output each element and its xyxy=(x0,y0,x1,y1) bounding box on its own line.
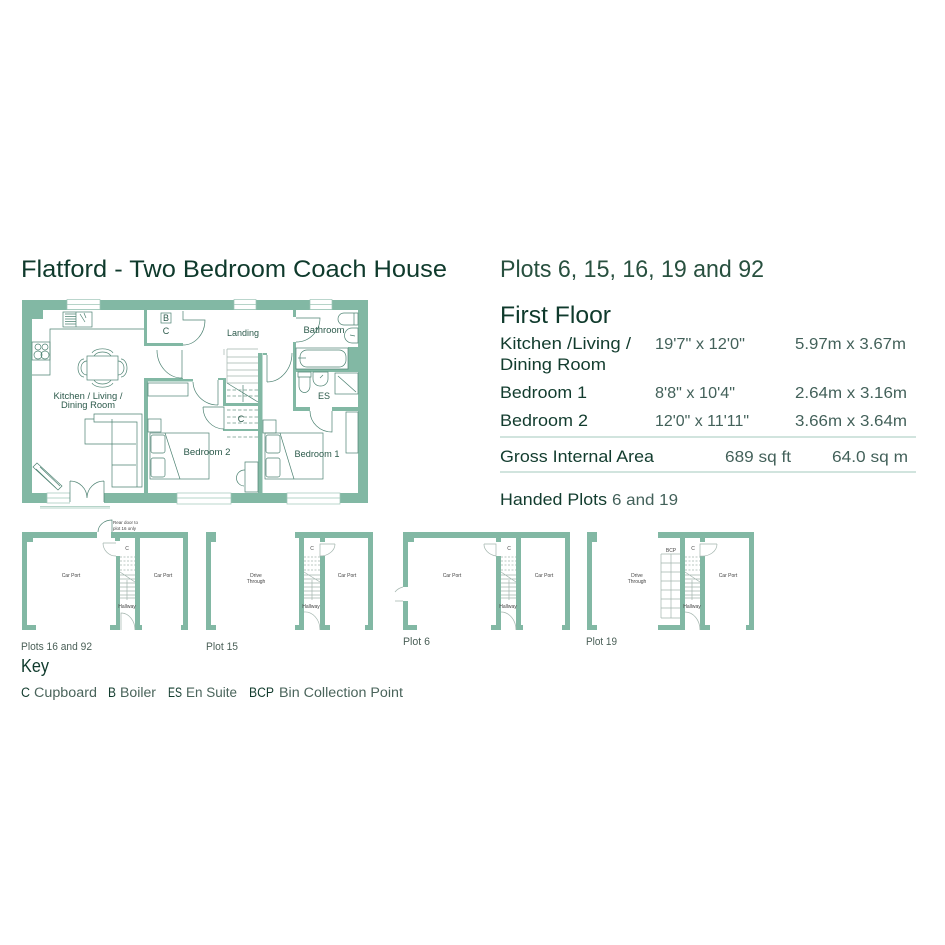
internal walls xyxy=(144,310,358,493)
ground plan: plot 6: Hallway xyxy=(499,604,517,610)
key items: Cupboard xyxy=(34,685,97,700)
bathroom label: Bathroom xyxy=(304,325,344,335)
media unit xyxy=(33,463,62,490)
key items: En Suite xyxy=(186,685,237,700)
handed plots note: 6 and 19 xyxy=(612,492,678,509)
ground plan: plots 16 and 92: Car Port xyxy=(62,573,81,579)
ground plan: plot 15: Through xyxy=(247,579,266,585)
ground plan: plot 15 xyxy=(206,532,373,630)
en suite label: ES xyxy=(318,391,330,401)
ground plan: plot 6 xyxy=(395,532,570,630)
kitchen row: Kitchen /Living / xyxy=(500,335,631,353)
key items: B xyxy=(108,685,116,700)
ground plan: plot 19 xyxy=(587,532,754,630)
ground plan: plots 16 and 92: Rear door to xyxy=(113,520,139,525)
ground plan: plot 19: Drive xyxy=(631,573,643,579)
key items: ES xyxy=(168,685,182,700)
bedroom 1 label: Bedroom 1 xyxy=(294,449,340,459)
bin collection grid xyxy=(661,554,680,618)
ground plan: plot 19: Car Port xyxy=(719,573,738,579)
kitchen row: 5.97m x 3.67m xyxy=(795,336,906,353)
windows xyxy=(40,300,340,508)
cupboard and boiler xyxy=(161,313,171,336)
ground plan: plots 16 and 92: plot 16 only xyxy=(113,526,137,531)
bedroom 1 furniture xyxy=(263,412,358,479)
key items: Bin Collection Point xyxy=(279,685,403,700)
first floor plan xyxy=(22,300,368,508)
en suite fittings xyxy=(298,372,358,394)
ground plan: plot 19: C xyxy=(691,546,695,552)
door swings xyxy=(157,311,332,432)
ground plan: plot 15: C xyxy=(310,546,314,552)
kitchen row: 19'7" x 12'0" xyxy=(655,336,745,353)
ground plan: plot 19: BCP xyxy=(666,548,677,554)
plot 15 label: Plot 15 xyxy=(206,641,238,653)
ground plan: plot 15: Car Port xyxy=(338,573,357,579)
ground plan: plot 19: Hallway xyxy=(683,604,701,610)
room dimensions table xyxy=(500,335,916,472)
bedroom 1 row: 2.64m x 3.16m xyxy=(795,385,907,402)
kitchen label: Dining Room xyxy=(61,400,115,410)
key items: Boiler xyxy=(120,685,157,700)
ground plan: plots 16 and 92 xyxy=(22,520,188,630)
bedroom 1 row: 8'8" x 10'4" xyxy=(655,385,735,402)
plots 16 and 92 label: Plots 16 and 92 xyxy=(21,641,92,653)
cupboard label: C xyxy=(238,414,245,424)
plot 19 label: Plot 19 xyxy=(586,636,617,648)
first floor heading: First Floor xyxy=(500,302,611,329)
kitchen units xyxy=(32,312,144,375)
gross internal area row: 689 sq ft xyxy=(725,449,792,466)
cupboard and boiler: C xyxy=(163,326,170,336)
key items: C xyxy=(21,685,30,700)
ground plan: plot 6: Car Port xyxy=(443,573,462,579)
ground plan: plots 16 and 92: Hallway xyxy=(118,604,136,610)
ground plan: plot 15: Drive xyxy=(250,573,262,579)
kitchen label xyxy=(54,391,123,410)
bedroom 2 row: Bedroom 2 xyxy=(500,412,588,430)
kitchen row: Dining Room xyxy=(500,356,606,374)
staircase xyxy=(224,349,258,437)
gross internal area row xyxy=(500,448,908,466)
kitchen row xyxy=(500,335,906,374)
handed plots note xyxy=(500,491,678,509)
gross internal area row: Gross Internal Area xyxy=(500,448,655,466)
patio doors xyxy=(70,481,104,502)
key heading: Key xyxy=(21,656,49,676)
title: Flatford - Two Bedroom Coach House xyxy=(21,256,447,283)
landing label: Landing xyxy=(227,328,259,338)
ground plan: plots 16 and 92: C xyxy=(125,546,129,552)
key items xyxy=(21,685,403,700)
bedroom 2 row xyxy=(500,412,907,430)
gross internal area row: 64.0 sq m xyxy=(832,449,908,466)
outer walls xyxy=(22,300,368,503)
handed plots note: Handed Plots xyxy=(500,491,607,509)
kitchen label: Kitchen / Living / xyxy=(54,391,123,401)
plots heading: Plots 6, 15, 16, 19 and 92 xyxy=(500,256,764,283)
dining table xyxy=(78,349,127,387)
cupboard and boiler: B xyxy=(163,313,169,323)
ground plan: plot 15: Hallway xyxy=(302,604,320,610)
bedroom 2 row: 3.66m x 3.64m xyxy=(795,413,907,430)
bedroom 2 label: Bedroom 2 xyxy=(184,447,230,457)
ground plan: plots 16 and 92: Car Port xyxy=(154,573,173,579)
ground plan: plot 6: Car Port xyxy=(535,573,554,579)
bedroom 2 furniture xyxy=(148,383,258,492)
ground plan: plot 6: C xyxy=(507,546,511,552)
plot 6 label: Plot 6 xyxy=(403,636,430,648)
key items: BCP xyxy=(249,685,274,700)
bedroom 1 row xyxy=(500,384,907,402)
bathroom fittings xyxy=(296,313,358,369)
sofa xyxy=(85,414,142,487)
bedroom 1 row: Bedroom 1 xyxy=(500,384,587,402)
bedroom 2 row: 12'0" x 11'11" xyxy=(655,413,749,430)
ground plan: plot 19: Through xyxy=(628,579,647,585)
